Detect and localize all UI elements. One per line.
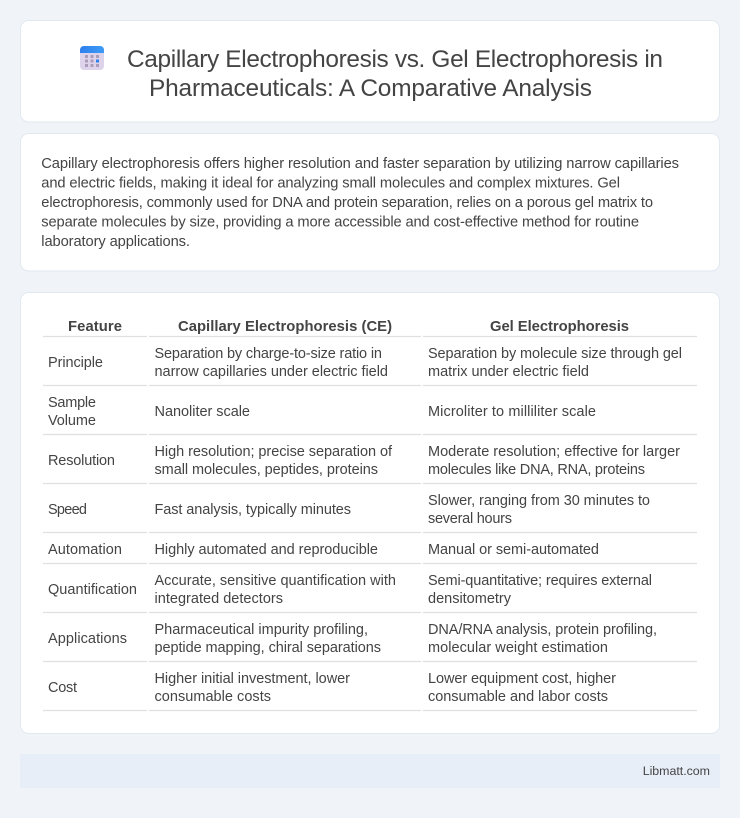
row: quantification: integrated detectors [154, 591, 283, 607]
table row rules [43, 336, 697, 710]
table header: Capillary Electrophoresis (CE) [178, 319, 392, 335]
row: principle: matrix under electric field [428, 364, 589, 380]
row: automation [48, 542, 599, 558]
row: quantification: Accurate, sensitive quantification with [154, 573, 396, 589]
icon: calendar grid [80, 46, 104, 70]
text block: introduction paragraph: and electric fields, making it ideal for analyzing small molecules and complex mixtures. Gel [41, 176, 620, 192]
text block: introduction paragraph: laboratory applications. [41, 234, 190, 250]
row: resolution: molecules like DNA, RNA, proteins [428, 462, 645, 478]
footer [20, 754, 720, 788]
text block: introduction paragraph [41, 156, 679, 250]
text block: introduction paragraph: electrophoresis, commonly used for DNA and protein separation, relies on a porous gel matrix to [41, 195, 653, 211]
row: quantification: Semi-quantitative; requires external [428, 573, 652, 589]
row: sample volume: Volume [48, 413, 96, 429]
row: cost: consumable costs [154, 689, 271, 705]
row: automation: Highly automated and reproducible [154, 542, 378, 558]
panel: introduction [20, 134, 720, 271]
table header: Gel Electrophoresis [490, 319, 629, 335]
table header [68, 319, 629, 335]
row: cost: Lower equipment cost, higher [428, 671, 616, 687]
row: resolution [48, 444, 680, 478]
row: cost: consumable and labor costs [428, 689, 608, 705]
row: resolution: Moderate resolution; effective for larger [428, 444, 680, 460]
row: cost: Higher initial investment, lower [154, 671, 350, 687]
text block: introduction paragraph: Capillary electrophoresis offers higher resolution and faster separation by utilizing narrow capillaries [41, 156, 679, 172]
text block: introduction paragraph: separate molecules by size, providing a more accessible and cost-effective method for routine [41, 214, 639, 230]
row: speed [48, 493, 650, 527]
row: sample volume [48, 395, 596, 429]
row: cost [48, 671, 616, 705]
row: resolution: small molecules, peptides, proteins [154, 462, 378, 478]
row: automation: Manual or semi-automated [428, 542, 599, 558]
row: sample volume: Nanoliter scale [154, 404, 250, 420]
row: quantification: Quantification [48, 582, 137, 598]
row: quantification: densitometry [428, 591, 512, 607]
title: Capillary Electrophoresis vs. Gel Electrophoresis in [127, 46, 663, 73]
row: applications: peptide mapping, chiral separations [154, 640, 381, 656]
row: sample volume: Sample [48, 395, 96, 411]
row: speed: several hours [428, 511, 512, 527]
row: resolution: High resolution; precise separation of [154, 444, 393, 460]
row: principle: Separation by molecule size through gel [428, 346, 682, 362]
row: applications: DNA/RNA analysis, protein profiling, [428, 622, 657, 638]
row: applications: Applications [48, 631, 127, 647]
row: speed: Speed [48, 502, 87, 518]
footer credit: Libmatt.com [643, 764, 710, 778]
row: applications: Pharmaceutical impurity profiling, [154, 622, 368, 638]
title: Pharmaceuticals: A Comparative Analysis [149, 75, 592, 102]
row: sample volume: Microliter to milliliter scale [428, 404, 596, 420]
table header: Feature [68, 319, 122, 335]
row: resolution: Resolution [48, 453, 115, 469]
row: principle [48, 346, 682, 380]
row: applications [48, 622, 657, 656]
title [127, 46, 663, 102]
row: quantification [48, 573, 652, 607]
panel: title card [20, 20, 720, 122]
row: speed: Slower, ranging from 30 minutes to [428, 493, 650, 509]
row: principle: narrow capillaries under electric field [154, 364, 388, 380]
row: applications: molecular weight estimation [428, 640, 608, 656]
row: cost: Cost [48, 680, 77, 696]
row: automation: Automation [48, 542, 122, 558]
row: principle: Separation by charge-to-size ratio in [154, 346, 382, 362]
row: principle: Principle [48, 355, 103, 371]
panel: comparison table [20, 292, 720, 734]
row: speed: Fast analysis, typically minutes [154, 502, 351, 518]
